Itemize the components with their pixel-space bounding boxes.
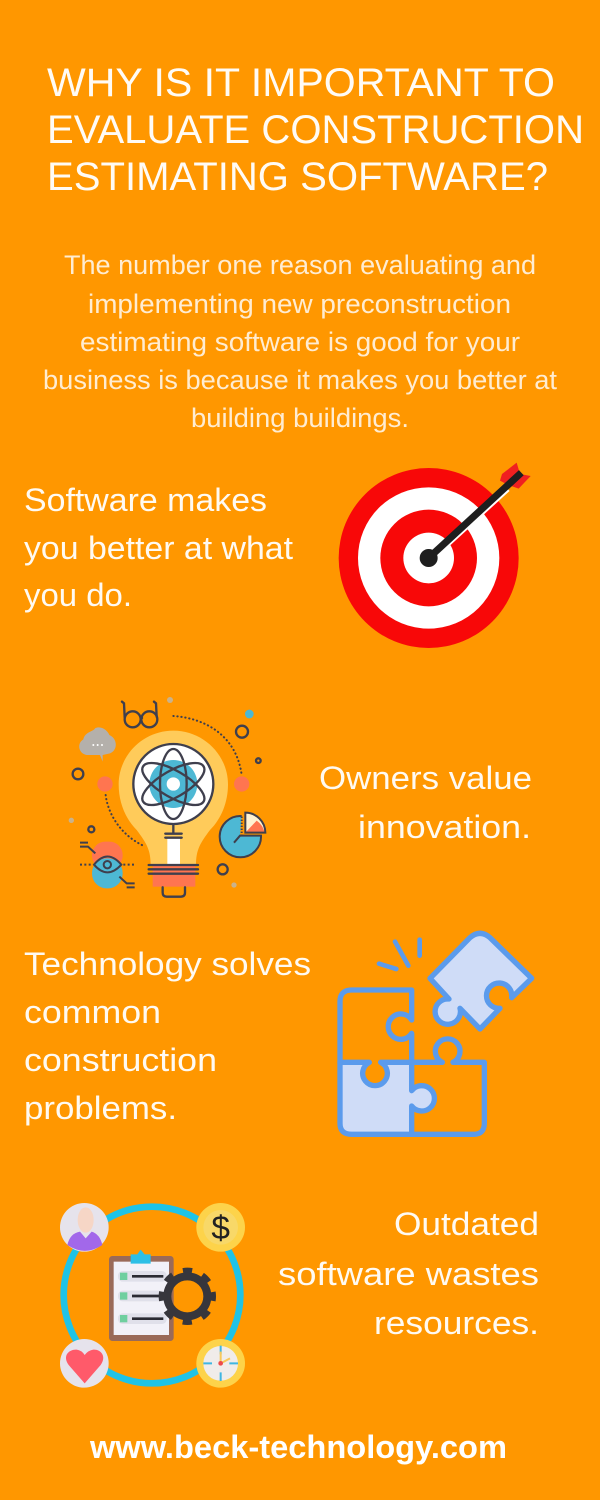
piece: top left — [340, 990, 412, 1062]
text: outdated software wastes resources — [278, 1206, 539, 1341]
cloud — [79, 727, 116, 762]
text: owners value innovation — [319, 760, 532, 845]
piece: bottom left — [340, 1062, 434, 1134]
piece: top right — [430, 933, 532, 1029]
intro paragraph — [43, 250, 557, 433]
text: outdated software wastes resources: resources. — [374, 1305, 539, 1341]
text: technology solves problems: construction — [24, 1042, 217, 1078]
text: owners value innovation: innovation. — [358, 809, 531, 845]
intro paragraph: The number one reason evaluating and — [64, 250, 536, 280]
icon: puzzle pieces — [340, 933, 532, 1134]
dollar badge — [196, 1203, 245, 1252]
title — [47, 61, 584, 199]
glasses — [125, 711, 141, 727]
text: software makes you better — [24, 482, 293, 613]
text: outdated software wastes resources: Outdated — [394, 1206, 539, 1242]
text: software makes you better: you do. — [24, 577, 132, 613]
text: owners value innovation: Owners value — [319, 760, 532, 796]
text: technology solves problems — [24, 946, 311, 1126]
eye — [92, 842, 123, 869]
text: technology solves problems: common — [24, 994, 161, 1030]
text: technology solves problems: problems. — [24, 1090, 177, 1126]
intro paragraph: business is because it makes you better at — [43, 365, 557, 395]
title: ESTIMATING SOFTWARE? — [47, 155, 548, 199]
footer url: www.beck-technology.com — [89, 1429, 507, 1465]
title: EVALUATE CONSTRUCTION — [47, 108, 584, 152]
text: technology solves problems: Technology solves — [24, 946, 311, 982]
spark lines — [379, 940, 420, 969]
clipboard — [109, 1256, 174, 1341]
bulb glass — [119, 731, 228, 865]
title: WHY IS IT IMPORTANT TO — [47, 61, 555, 105]
gear — [167, 1276, 207, 1316]
icon: target with arrow — [339, 463, 531, 648]
text: outdated software wastes resources: software wastes — [278, 1256, 539, 1292]
heart badge — [60, 1339, 109, 1388]
rings — [236, 726, 248, 738]
icon: resource cycle with clipboard and gear: $ — [211, 1210, 230, 1247]
intro paragraph: estimating software is good for your — [80, 327, 520, 357]
intro paragraph: building buildings. — [191, 403, 409, 433]
icon: resource cycle with clipboard and gear — [60, 1203, 245, 1388]
pie chart — [220, 816, 261, 857]
icon: light bulb with atom — [69, 697, 265, 897]
compass badge — [196, 1339, 245, 1388]
text: software makes you better: you better at what — [24, 530, 293, 566]
text: software makes you better: Software makes — [24, 482, 267, 518]
piece: bottom right — [412, 1039, 484, 1134]
dotted arcs — [173, 716, 242, 775]
intro paragraph: implementing new preconstruction — [88, 289, 511, 319]
user badge — [60, 1203, 109, 1252]
